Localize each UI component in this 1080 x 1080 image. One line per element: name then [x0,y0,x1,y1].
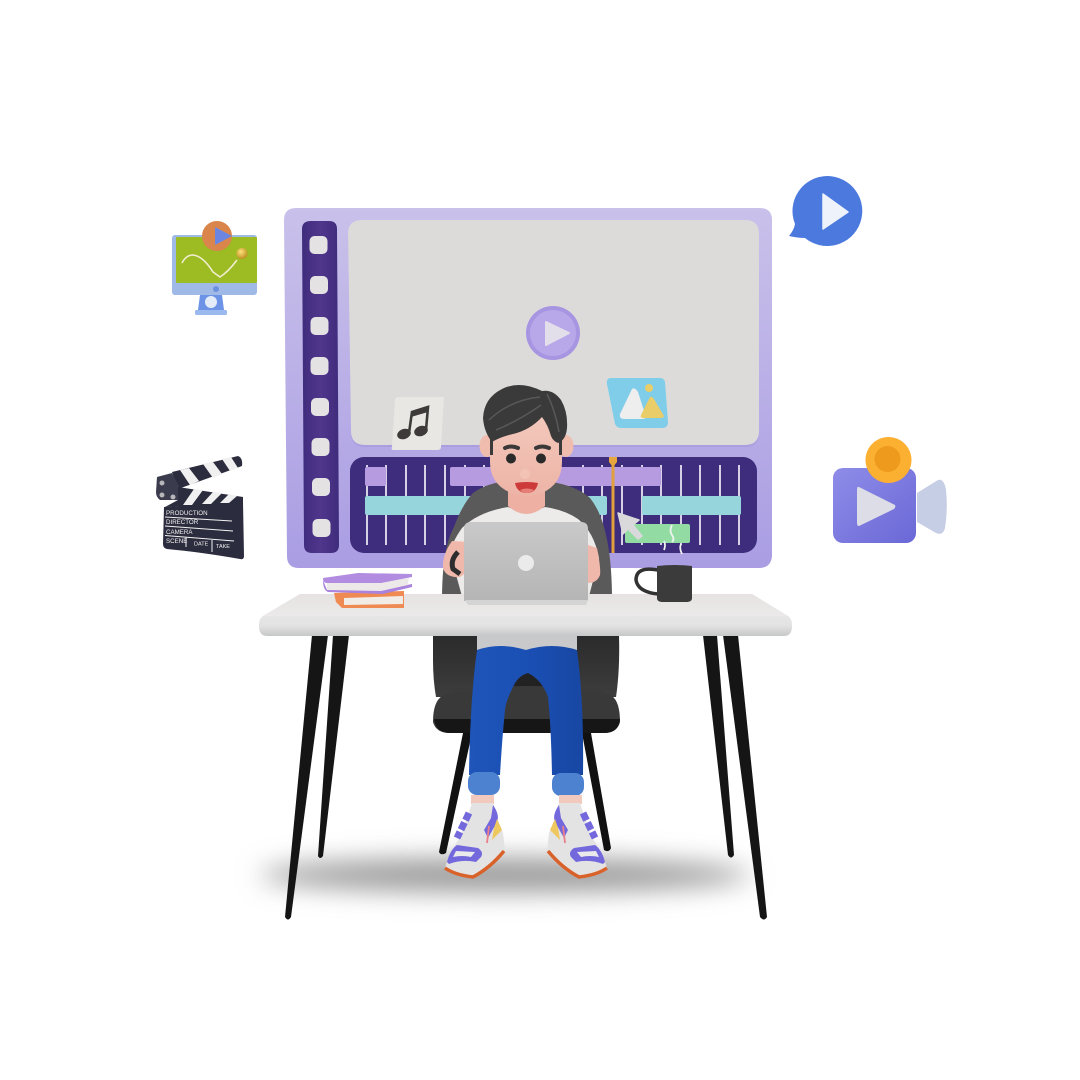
clapper body [163,502,244,559]
teal clips [365,496,741,515]
eyebrows [505,446,549,448]
camera lens [917,480,947,534]
eyes [506,454,546,464]
preview screen [348,220,759,447]
ears [480,435,574,457]
clapper stripes [165,487,243,507]
left cuff [468,772,500,795]
desk [259,594,792,920]
clapper arm [172,456,242,489]
right arm [588,545,600,583]
sideburns [490,438,562,455]
purple book [323,573,412,594]
clapper hinge [156,473,180,500]
mouth [515,482,538,493]
camera body [833,468,916,543]
socks [471,795,582,804]
icon: music card [392,397,444,450]
timeline ticks [367,465,739,545]
hair [483,385,567,443]
books [323,573,412,608]
nose [520,469,530,479]
icon: speech bubble play [789,176,862,246]
orange book [334,591,404,608]
purple clips [365,467,661,486]
center play button [526,306,580,360]
camera orange reel [866,437,912,483]
shirt [450,507,599,600]
icon: monitor with play [172,221,257,315]
gold ball [236,248,248,259]
left arm and watch [443,541,470,577]
right cuff [552,773,584,796]
floor shadow [260,858,750,892]
laptop [464,522,588,605]
desk legs [285,635,767,920]
right shoe [547,803,607,877]
chair arm left [433,636,478,697]
chair arm right [577,636,619,697]
mug [636,565,692,602]
shirt hem [477,636,577,656]
monitor body [172,235,257,295]
timeline [350,457,757,554]
chair seat [433,686,620,733]
icon: image card [607,378,668,428]
clapper body: DIRECTOR [166,519,199,526]
neck [508,485,545,514]
left shoe [445,803,505,877]
face [490,415,562,496]
playhead [609,457,617,553]
panel: video editor board [284,208,772,568]
cursor [618,513,642,539]
person upper body [443,385,600,600]
clapper body: SCENE [166,538,187,545]
person lower body [445,636,607,877]
clapper body: TAKE [216,544,230,550]
icon: clapperboard [156,456,244,559]
film strip [302,221,339,553]
chair inner back [470,636,585,706]
clapper body: CAMERA [166,529,193,536]
monitor stand [195,295,227,315]
clapper body: DATE [194,542,209,548]
green clip [625,524,690,554]
chair lower part [433,636,620,854]
icon: video camera [833,437,947,543]
orange play button [202,221,232,251]
desk top [259,594,792,636]
clapper body: PRODUCTION [166,510,208,517]
chair legs [439,733,611,854]
jeans [469,646,583,775]
chair back [442,480,612,600]
